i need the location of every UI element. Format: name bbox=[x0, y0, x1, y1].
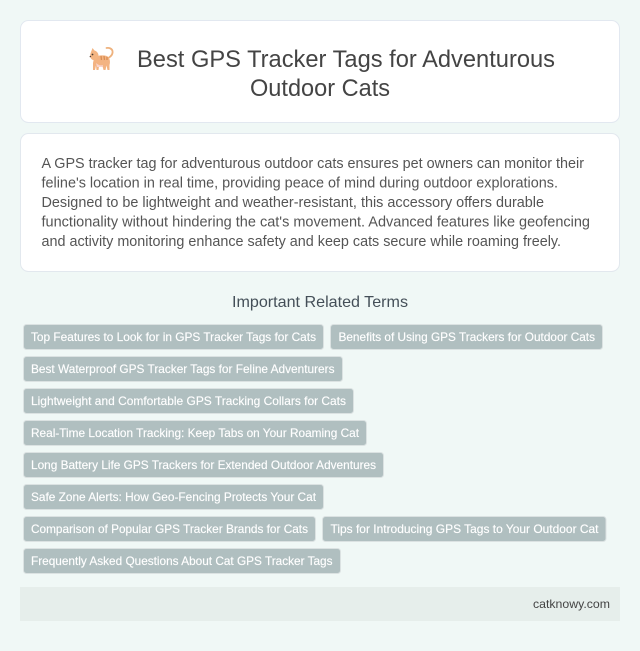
tag: lightweight: Lightweight and Comfortable GPS Tracking Collars for Cats bbox=[31, 394, 346, 408]
tag: faq bbox=[24, 548, 340, 574]
tag: benefits bbox=[330, 324, 602, 350]
description text bbox=[42, 156, 590, 250]
tag: comparison bbox=[24, 516, 316, 542]
title text: Best GPS Tracker Tags for Adventurous bbox=[137, 46, 555, 73]
tag list bbox=[24, 324, 606, 574]
tag: battery bbox=[24, 452, 384, 478]
tag: battery: Long Battery Life GPS Trackers for Extended Outdoor Adventures bbox=[31, 458, 376, 472]
tag: faq: Frequently Asked Questions About Cat GPS Tracker Tags bbox=[31, 554, 332, 568]
panel: description bbox=[20, 134, 620, 272]
description text: and activity monitoring enhance safety and keep cats secure while roaming freely. bbox=[42, 234, 561, 250]
footer: catknowy.com bbox=[533, 597, 610, 611]
tag: real-time: Real-Time Location Tracking: Keep Tabs on Your Roaming Cat bbox=[31, 426, 360, 440]
tag: top features bbox=[24, 324, 324, 350]
description text: functionality without hindering the cat's movement. Advanced features like geofencing bbox=[42, 214, 590, 230]
tag: safe zone: Safe Zone Alerts: How Geo-Fencing Protects Your Cat bbox=[31, 490, 317, 504]
tag: tips: Tips for Introducing GPS Tags to Your Outdoor Cat bbox=[330, 522, 599, 536]
heading: important related terms: Important Related Terms bbox=[232, 294, 408, 311]
tag: benefits: Benefits of Using GPS Trackers for Outdoor Cats bbox=[338, 330, 595, 344]
tag: waterproof bbox=[24, 356, 342, 382]
tag: safe zone bbox=[24, 484, 324, 510]
title text: Outdoor Cats bbox=[250, 75, 390, 102]
footer bbox=[20, 587, 620, 621]
icon: cat bbox=[90, 48, 113, 70]
description text: Designed to be lightweight and weather-resistant, this accessory offers durable bbox=[42, 195, 544, 211]
tag: tips bbox=[322, 516, 606, 542]
tag: waterproof: Best Waterproof GPS Tracker Tags for Feline Adventurers bbox=[31, 362, 334, 376]
panel: title card bbox=[20, 20, 620, 122]
tag: real-time bbox=[24, 420, 366, 446]
title text bbox=[137, 46, 555, 102]
tag: top features: Top Features to Look for in GPS Tracker Tags for Cats bbox=[31, 330, 316, 344]
tag: comparison: Comparison of Popular GPS Tracker Brands for Cats bbox=[31, 522, 308, 536]
description text: A GPS tracker tag for adventurous outdoor cats ensures pet owners can monitor their bbox=[42, 156, 584, 172]
description text: feline's location in real time, providing peace of mind during outdoor explorations. bbox=[42, 176, 558, 192]
tag: lightweight bbox=[24, 388, 354, 414]
